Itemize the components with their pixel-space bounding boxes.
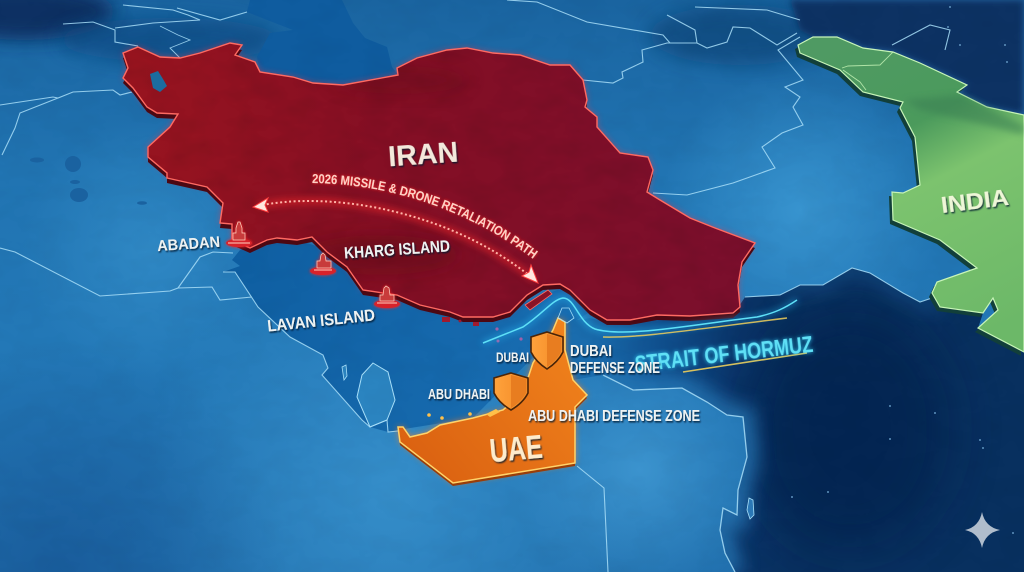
label: Strait of Hormuz: STRAIT OF HORMUZ <box>633 331 814 377</box>
icon: Kharg refinery <box>310 253 336 275</box>
country: UAE <box>398 308 587 486</box>
islands along the Iranian coast <box>442 290 552 342</box>
arrowhead: west <box>253 198 268 212</box>
country: India <box>795 37 1024 356</box>
lakes in Iraq <box>30 156 147 205</box>
Strait of Hormuz <box>483 298 814 377</box>
icon: Abu Dhabi shield <box>494 373 528 410</box>
Lake Urmia <box>150 71 167 92</box>
small islands <box>427 409 500 420</box>
land: Bahrain <box>342 365 347 380</box>
Musandam outline <box>558 308 574 323</box>
label: Lavan Island: LAVAN ISLAND <box>267 306 376 336</box>
watermark sparkle icon <box>965 512 1000 548</box>
dark terrain: north of Afghanistan <box>650 5 830 65</box>
path label <box>312 183 537 262</box>
country: Iran <box>120 40 760 330</box>
label: Dubai Defense Zone: DEFENSE ZONE <box>570 360 660 377</box>
arrowhead: east <box>522 265 538 283</box>
oil facilities <box>226 222 400 308</box>
land: Qatar <box>357 363 395 427</box>
label: Abadan: ABADAN <box>157 234 221 255</box>
missile and drone retaliation path: 2026 MISSILE & DRONE RETALIATION PATH <box>310 172 540 260</box>
label: Kharg Island: KHARG ISLAND <box>344 237 451 263</box>
UAE defense zones <box>428 332 700 425</box>
label: India: INDIA <box>939 184 1010 218</box>
dark vignette: top-left <box>0 0 115 40</box>
Iran-side location labels <box>157 234 451 336</box>
label: Iran: IRAN <box>387 137 459 173</box>
sea: Persian Gulf <box>223 235 590 432</box>
icon: Lavan refinery <box>374 286 400 308</box>
sea: Gulf of Oman and Arabian Sea <box>565 268 1024 572</box>
yellow upper line <box>603 318 787 337</box>
label: Dubai: DUBAI <box>496 350 529 365</box>
sea: Caspian <box>247 0 398 85</box>
shipping lane glow <box>483 298 797 343</box>
label: Dubai Defense Zone: DUBAI <box>570 343 612 360</box>
dark terrain: north of Iran <box>60 18 280 62</box>
island: Masirah <box>747 498 754 519</box>
label: UAE: UAE <box>488 428 544 469</box>
label: Abu Dhabi: ABU DHABI <box>428 387 490 403</box>
label: Abu Dhabi Defense Zone: ABU DHABI DEFENSE ZONE <box>528 408 700 425</box>
icon: Abadan refinery <box>226 222 252 247</box>
yellow lower line <box>683 353 807 372</box>
missile and drone retaliation path <box>252 172 540 284</box>
sea stars <box>791 6 1014 534</box>
icon: Dubai shield <box>531 332 563 369</box>
top right dark region <box>790 0 1024 115</box>
